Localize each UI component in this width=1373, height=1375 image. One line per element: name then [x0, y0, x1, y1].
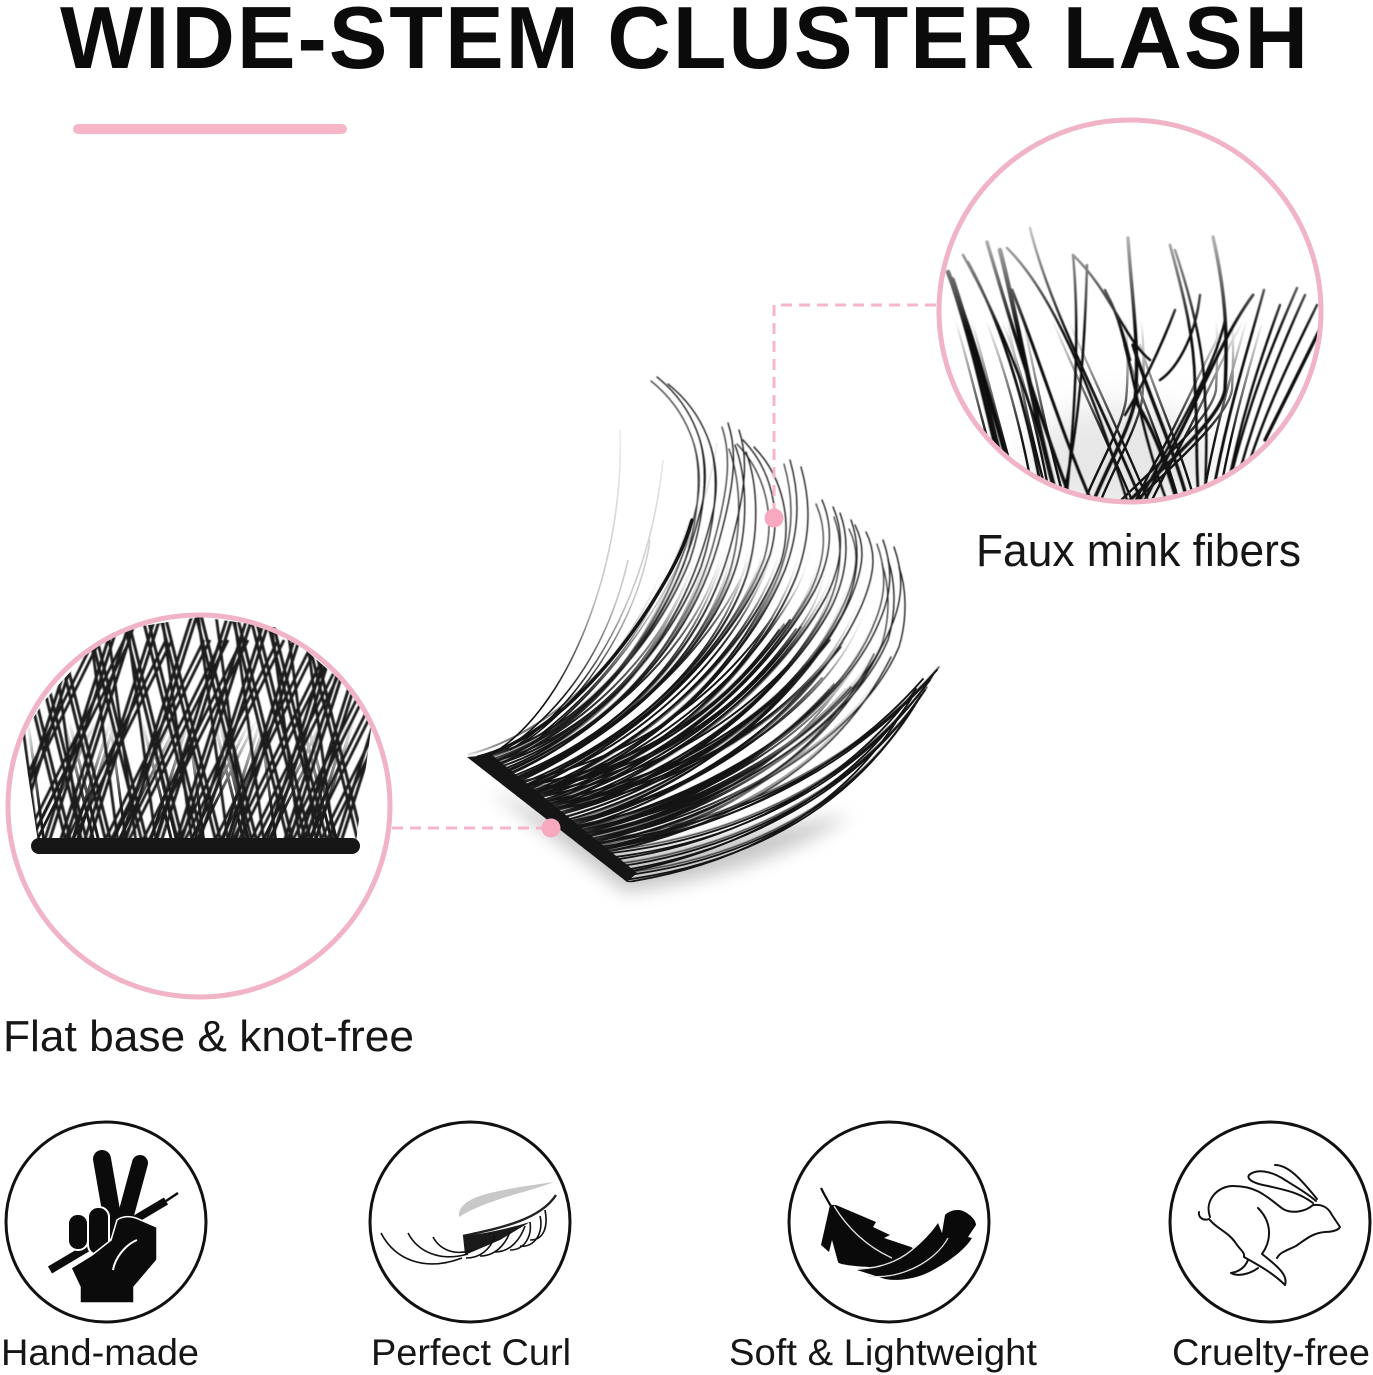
dense lower fibers: [956, 324, 1262, 500]
lower fan fibers: [561, 670, 937, 885]
icon: feather: [789, 1122, 989, 1322]
eyelid: [463, 1195, 556, 1236]
label: faux mink fibers: Faux mink fibers: [976, 525, 1301, 576]
palm and thumb: [71, 1217, 157, 1303]
feather right half: [857, 1210, 976, 1280]
connector: flat base: [392, 818, 560, 838]
feather quill: [821, 1188, 836, 1214]
raised fingers: [102, 1159, 140, 1222]
connector: faux mink fibers: [764, 305, 936, 528]
dense lower lattice: [28, 723, 354, 838]
upper fine fibers: [464, 377, 939, 873]
product: cluster lash: [452, 375, 939, 892]
detail circle: faux mink fibers: [939, 120, 1322, 515]
pink ring: [8, 615, 390, 997]
icon: rabbit: [1170, 1122, 1370, 1322]
feather highlights: [834, 1206, 948, 1277]
dense lower fibers: [468, 558, 871, 854]
faded lash fibers: [490, 430, 717, 755]
curled fingers: [68, 1207, 109, 1255]
pencil: [50, 1193, 178, 1270]
icon: hand-made: [6, 1122, 206, 1322]
lash shadow: [490, 790, 850, 892]
pink ring: [939, 120, 1321, 502]
rabbit outline: [1199, 1165, 1340, 1285]
label: perfect curl: Perfect Curl: [371, 1332, 571, 1373]
brow: [459, 1182, 554, 1217]
flat base band: [31, 838, 360, 854]
outer thick fiber: [478, 520, 692, 757]
pink accent bar: [73, 124, 347, 134]
long lashes: [381, 1210, 546, 1264]
label: hand-made: Hand-made: [1, 1332, 199, 1373]
flat lash band: [467, 755, 637, 882]
crossed fibers: [22, 618, 371, 840]
icon: perfect curl: [370, 1122, 570, 1322]
detail circle: flat base: [0, 615, 426, 997]
label: soft and lightweight: Soft & Lightweight: [729, 1332, 1038, 1373]
feather left half: [821, 1205, 925, 1267]
lash band: [463, 1222, 530, 1255]
soft shadow: [1030, 405, 1210, 515]
fibers: [948, 228, 1322, 510]
label: cruelty-free: Cruelty-free: [1172, 1332, 1370, 1373]
label: flat base: Flat base & knot-free: [3, 1012, 414, 1061]
